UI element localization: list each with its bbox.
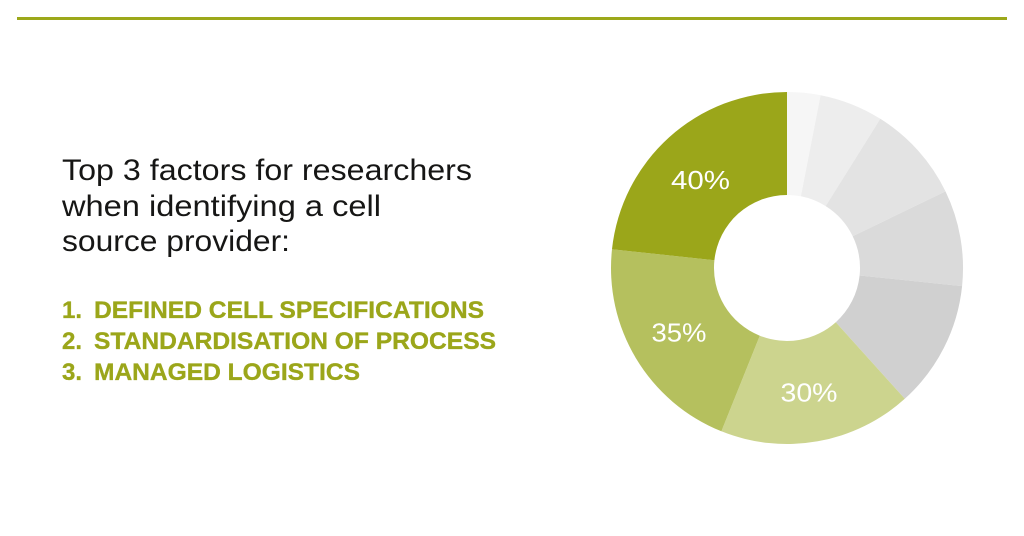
label: 40%: 40% <box>671 165 730 195</box>
grey segment 4 <box>853 191 963 286</box>
factor 2: 2. <box>62 328 82 355</box>
numbered list of top 3 factors <box>62 297 496 386</box>
grey segment 3 <box>826 119 946 236</box>
segment: 40% <box>612 92 787 260</box>
top green rule <box>17 17 1007 20</box>
grey segment 1 <box>787 92 821 196</box>
grey segment 2 <box>801 95 880 206</box>
donut chart <box>611 92 963 444</box>
heading: when identifying a cell <box>61 190 381 223</box>
label: 35%: 35% <box>652 318 706 348</box>
heading: source provider: <box>62 225 290 258</box>
grey segment 5 <box>836 276 962 399</box>
factor 3: MANAGED LOGISTICS <box>94 359 360 386</box>
segment: 35% <box>611 249 760 431</box>
heading <box>61 154 472 258</box>
factor 1: 1. <box>62 297 82 324</box>
segment: 30% <box>721 322 905 444</box>
heading: Top 3 factors for researchers <box>62 154 472 187</box>
factor 2: STANDARDISATION OF PROCESS <box>94 328 496 355</box>
factor 1: DEFINED CELL SPECIFICATIONS <box>94 297 484 324</box>
factor 3: 3. <box>62 359 82 386</box>
label: 30%: 30% <box>780 378 838 408</box>
